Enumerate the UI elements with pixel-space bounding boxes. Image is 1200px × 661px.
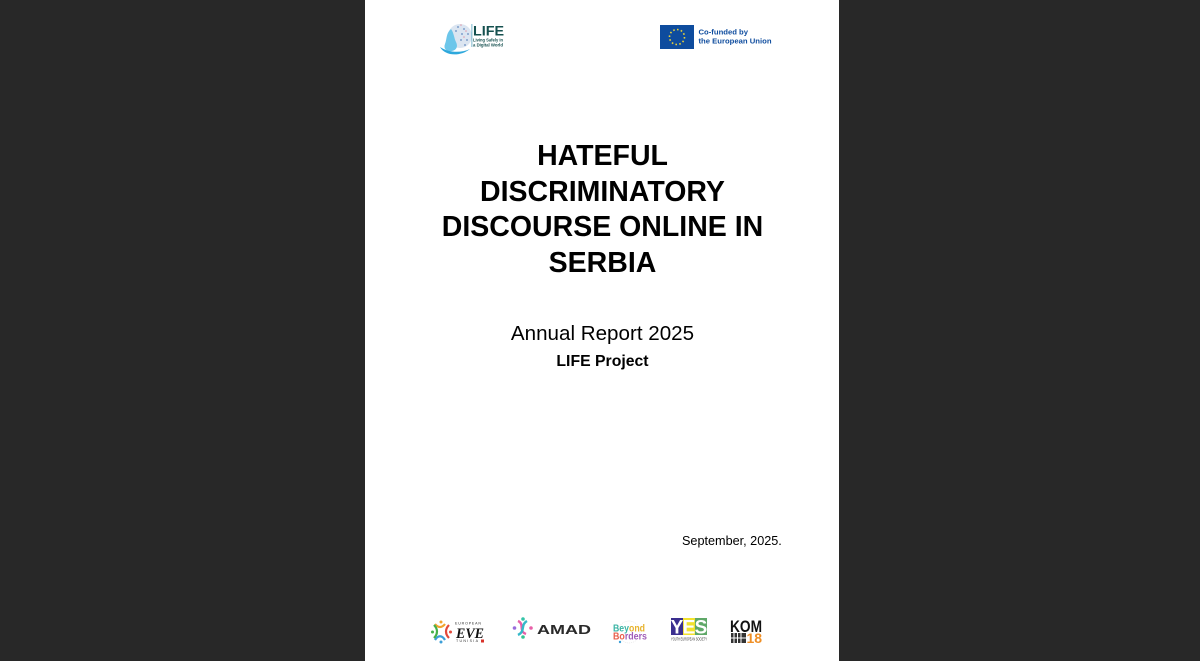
logo: YES: S [695, 618, 707, 638]
project name: LIFE Project [556, 353, 649, 370]
logo: LIFE project: a Digital World [473, 42, 503, 47]
logo: EU co-funded [660, 25, 772, 49]
logo: Beyond Borders: Borders [613, 632, 647, 642]
logo: LIFE project: LIFE [473, 24, 504, 38]
logo: Beyond Borders [613, 620, 647, 644]
logo: AMAD: AMAD [537, 623, 591, 637]
logo: YES [671, 618, 707, 642]
logo: European Eve: EVE [455, 626, 484, 642]
title: DISCRIMINATORY [480, 176, 725, 208]
logo: KOM 18 [730, 617, 762, 646]
logo: LIFE project: Living Safely in [473, 38, 503, 42]
logo: AMAD [512, 617, 591, 639]
date: September, 2025. [682, 534, 782, 548]
page sheet [365, 0, 839, 661]
title [442, 140, 763, 278]
logo: LIFE project [440, 24, 504, 54]
logo: Beyond Borders: Beyond [613, 624, 645, 634]
logo: European Eve: TUNISIA [456, 639, 479, 643]
logo: YES: E [683, 618, 695, 638]
logo: YES: Y [671, 618, 684, 638]
logo: EU co-funded: Co-funded by [698, 28, 749, 36]
title: HATEFUL [537, 140, 668, 172]
logo: KOM 18: 18 [746, 630, 762, 646]
logo: European Eve [431, 620, 484, 644]
logo: European Eve: EUROPEAN [455, 622, 481, 626]
title: DISCOURSE ONLINE IN [442, 211, 763, 243]
logo: KOM 18: KOM [730, 617, 762, 636]
title: SERBIA [549, 246, 656, 278]
subtitle: Annual Report 2025 [511, 322, 694, 344]
logo: YES: YOUTH EUROPEAN SOCIETY [671, 636, 707, 642]
logo: EU co-funded: the European Union [698, 36, 772, 46]
